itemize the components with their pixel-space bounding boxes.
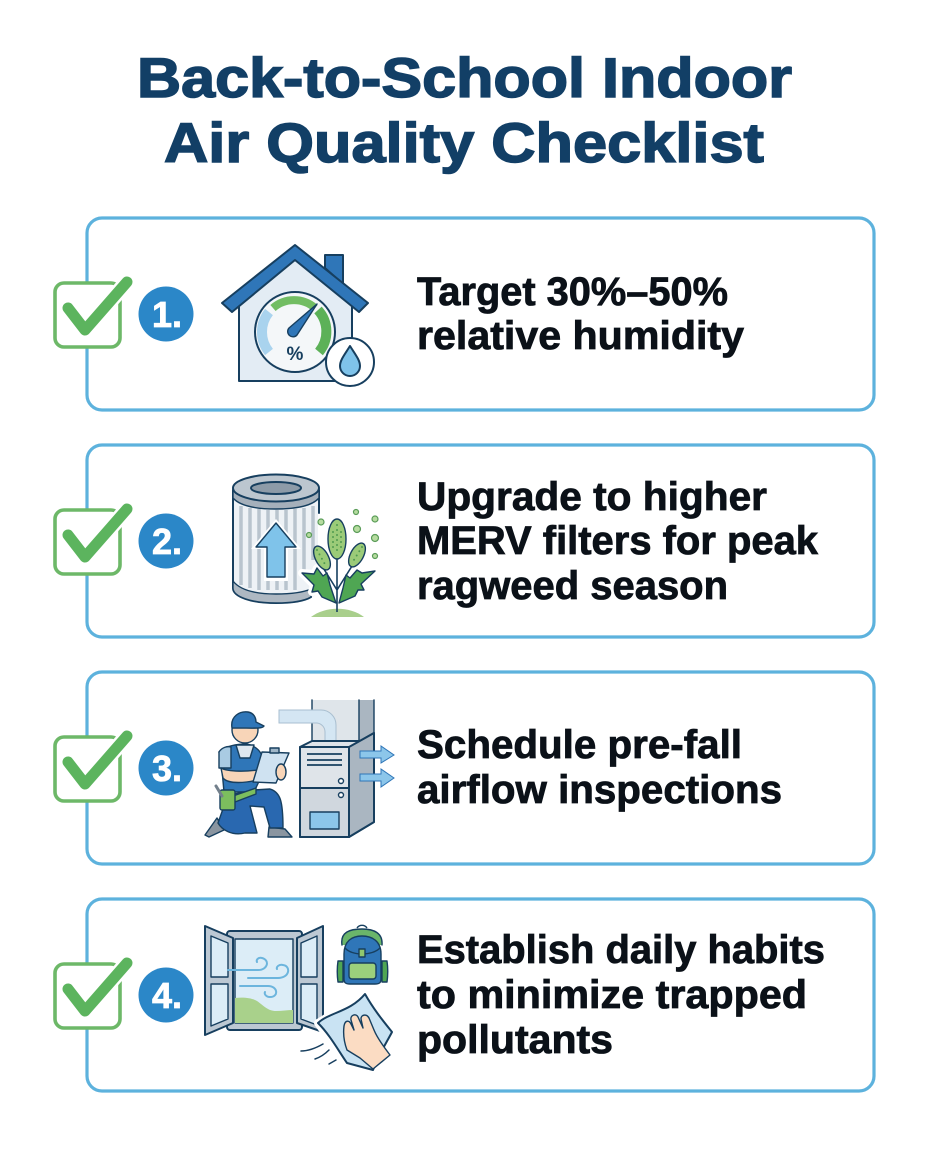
- icon: open window, backpack and cleaning hand: [205, 925, 392, 1070]
- filter body: [233, 474, 319, 603]
- text 3: airflow inspections: [417, 768, 782, 812]
- panel: item 4 habits: [55, 899, 874, 1091]
- checkbox 4: [55, 963, 127, 1028]
- text 2: Upgrade to higher: [417, 475, 767, 519]
- hand: [344, 1015, 390, 1069]
- text 4: to minimize trapped: [417, 973, 807, 1017]
- text 1: Target 30%–50%: [417, 270, 728, 314]
- card frame 4: [87, 899, 874, 1091]
- text 2: [417, 475, 819, 608]
- title: Back-to-School Indoor: [137, 46, 792, 109]
- number badge 3: 3.: [152, 748, 182, 789]
- motion lines: [301, 1044, 336, 1064]
- checkbox 1: [55, 282, 127, 347]
- panel: item 1 humidity: [55, 218, 874, 410]
- icon: air filter and ragweed: [233, 474, 378, 617]
- technician: [205, 712, 292, 837]
- checkbox 3: [55, 736, 127, 801]
- airflow arrows: [360, 746, 394, 787]
- icon: house with humidity gauge: %: [287, 344, 304, 365]
- number badge 1: 1.: [152, 294, 182, 335]
- number badge 1: [138, 286, 194, 342]
- icon: technician and furnace: [205, 700, 394, 837]
- icon: house with humidity gauge: [222, 245, 374, 386]
- text 3: [417, 723, 782, 812]
- wind lines: [228, 958, 288, 997]
- card frame 3: [87, 672, 874, 864]
- number badge 4: [138, 968, 194, 1022]
- window: [205, 926, 323, 1035]
- number badge 2: [138, 514, 194, 568]
- text 1: relative humidity: [417, 314, 745, 358]
- title: [137, 46, 792, 174]
- text 1: [417, 270, 745, 358]
- upgrade arrow: [251, 519, 301, 581]
- panel: item 3 inspections: [55, 672, 874, 864]
- text 4: pollutants: [417, 1018, 613, 1062]
- panel: item 2 filters: [55, 445, 874, 637]
- number badge 4: 4.: [152, 975, 182, 1016]
- backpack: [337, 925, 388, 984]
- text 2: ragweed season: [417, 564, 728, 608]
- text 4: Establish daily habits: [417, 928, 825, 972]
- text 3: Schedule pre-fall: [417, 723, 742, 767]
- card frame 2: [87, 445, 874, 637]
- card frame 1: [87, 218, 874, 410]
- cloth: [318, 994, 392, 1063]
- number badge 3: [138, 740, 194, 796]
- furnace: [279, 700, 374, 837]
- checkbox 2: [55, 509, 127, 574]
- title: Air Quality Checklist: [164, 111, 764, 174]
- text 4: [417, 928, 825, 1062]
- text 2: MERV filters for peak: [417, 519, 819, 563]
- number badge 2: 2.: [152, 521, 182, 562]
- ragweed plant: [302, 510, 378, 617]
